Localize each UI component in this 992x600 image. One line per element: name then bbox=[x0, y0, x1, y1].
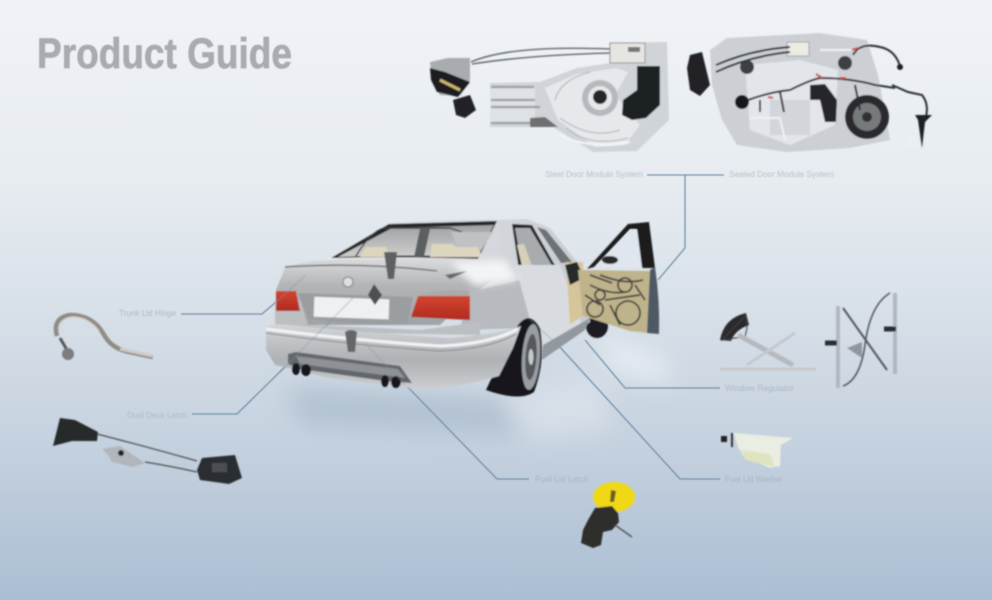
label: window regulator: Window Regulator bbox=[725, 383, 794, 393]
motor hub bbox=[593, 90, 607, 104]
icon: fuel lid latch bbox=[581, 482, 635, 548]
car: rim bbox=[520, 323, 542, 391]
cable bbox=[471, 48, 610, 64]
wiring harness bbox=[716, 46, 927, 120]
icon: window regulator cable bbox=[825, 293, 896, 388]
car: see-through latch bbox=[384, 252, 397, 279]
car: door inner panel bbox=[578, 270, 650, 333]
car: side sill bbox=[542, 318, 590, 360]
label: sealed door module system: Sealed Door Module System bbox=[729, 169, 834, 179]
motor bracket bbox=[622, 66, 660, 120]
small bracket bbox=[102, 446, 145, 467]
connector lines bbox=[181, 175, 724, 479]
icon: deck latch bbox=[53, 418, 242, 484]
icon: washer bottle bbox=[721, 433, 793, 468]
car: rear panel bbox=[275, 300, 480, 335]
port circles bbox=[740, 60, 754, 74]
car: shoulder highlight bbox=[450, 260, 518, 286]
icon: window regulator scissor bbox=[720, 313, 816, 369]
sealed plate bbox=[710, 33, 890, 152]
car: rear window bbox=[331, 221, 497, 259]
label: deck latch: Dual Deck Latch bbox=[127, 410, 187, 420]
steel plate bbox=[490, 42, 669, 152]
icon: sealed door module bbox=[687, 33, 932, 152]
connector plug bbox=[453, 95, 476, 118]
icon: steel door module bbox=[430, 42, 669, 152]
car: lower diffuser bbox=[288, 352, 412, 383]
yellow disc bbox=[593, 482, 635, 512]
car: right tail lamp bbox=[411, 296, 470, 320]
car: far front wheel bbox=[586, 314, 608, 338]
label: fuel lid washer: Fuel Lid Washer bbox=[725, 474, 783, 484]
label: fuel lid latch: Fuel Lid Latch bbox=[535, 474, 589, 484]
top bracket bbox=[610, 43, 645, 63]
car: badge bbox=[343, 277, 353, 287]
car bbox=[266, 219, 659, 397]
car: left tail lamp bbox=[276, 291, 300, 311]
car: license plate bbox=[314, 297, 389, 319]
car: plate recess bbox=[298, 293, 413, 325]
speaker bbox=[845, 95, 889, 139]
car: rear seats bbox=[360, 244, 482, 257]
car: under-bumper latch bbox=[345, 330, 357, 352]
deck cables bbox=[97, 434, 197, 472]
car: roof and cabin bbox=[280, 219, 590, 355]
car: rear wheel tyre bbox=[486, 318, 542, 397]
window motor bbox=[810, 84, 837, 122]
label: trunk lid hinge: Trunk Lid Hinge bbox=[119, 308, 176, 318]
car reflection bbox=[285, 335, 670, 440]
car: exhaust tips bbox=[292, 363, 401, 388]
car: rear bumper bbox=[266, 324, 521, 389]
label: steel door module system: Steel Door Module System bbox=[545, 169, 643, 179]
car: door jamb bbox=[566, 262, 583, 324]
black actuator bbox=[581, 506, 619, 548]
car: side windows bbox=[512, 224, 557, 270]
car: door mirror bbox=[602, 256, 618, 264]
actuator box bbox=[197, 455, 242, 484]
connector box bbox=[430, 58, 470, 96]
title: Product Guide bbox=[37, 30, 292, 78]
car: trunk lid bbox=[276, 259, 505, 325]
car: side body bbox=[460, 280, 535, 330]
icon: trunk lid hinge bbox=[56, 315, 153, 360]
latch body bbox=[53, 418, 98, 446]
door connector bbox=[687, 52, 710, 96]
car: connector lines seen over the body bbox=[276, 275, 558, 385]
car: open door frame bbox=[587, 222, 655, 269]
top bracket bbox=[787, 42, 809, 56]
